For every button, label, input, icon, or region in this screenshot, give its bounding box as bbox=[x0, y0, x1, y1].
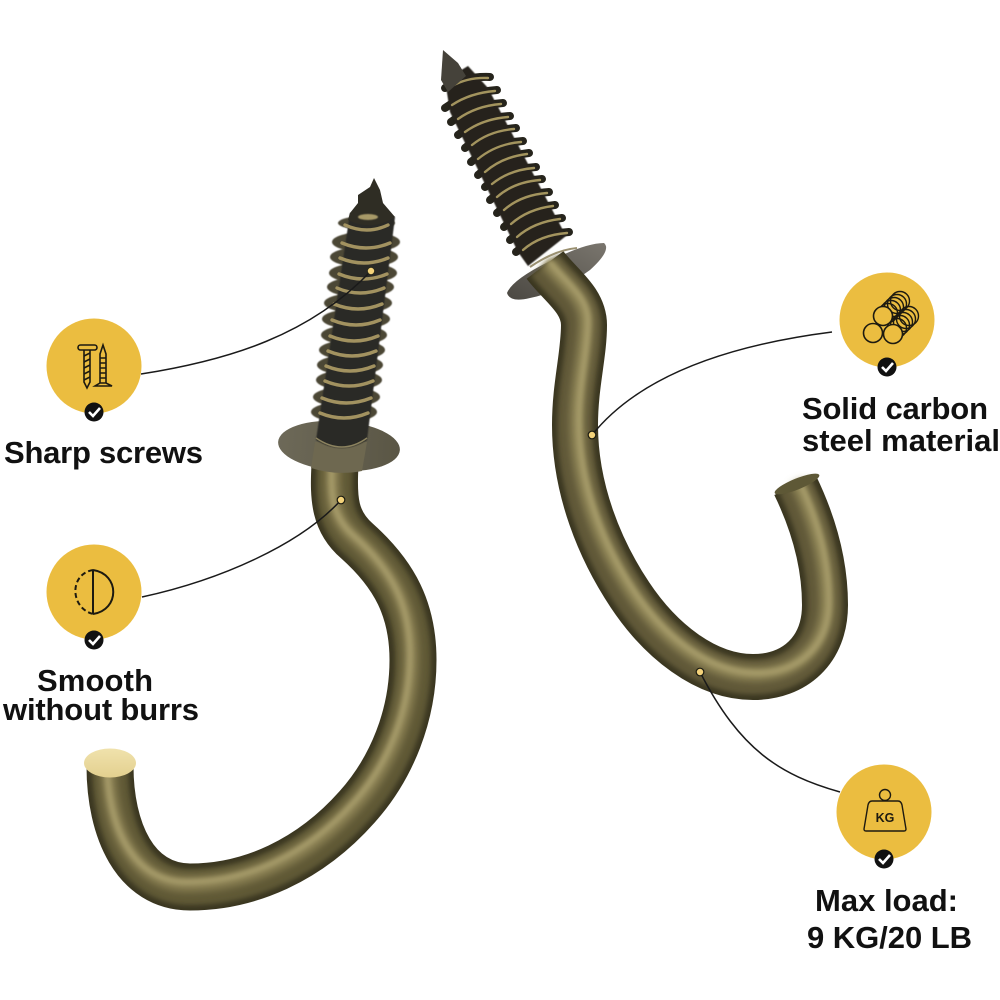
icon badge: screws bbox=[46, 318, 142, 414]
label: Smooth bbox=[37, 663, 153, 698]
check mark badge bbox=[878, 358, 896, 376]
label line 2: 9 KG/20 LB bbox=[807, 920, 972, 955]
right screw tip bbox=[441, 50, 466, 92]
icon: two screws bbox=[78, 345, 112, 388]
icon badge: steel rods bbox=[840, 272, 934, 368]
feature: sharp screws bbox=[4, 318, 203, 470]
left screw tip highlight bbox=[358, 214, 378, 220]
icon: stacked rods bbox=[864, 292, 918, 344]
left washer bbox=[276, 417, 402, 475]
right washer bbox=[507, 243, 606, 300]
check mark badge bbox=[84, 630, 104, 650]
left screw tip bbox=[348, 178, 395, 225]
connector: solid carbon steel bbox=[588, 332, 832, 439]
left washer collar bbox=[311, 442, 367, 473]
check mark badge bbox=[84, 402, 104, 422]
left screw base ring bbox=[316, 438, 367, 447]
feature: smooth without burrs bbox=[2, 544, 199, 727]
label line 2: steel material bbox=[802, 423, 1000, 458]
left hook body bbox=[107, 460, 413, 887]
icon: half solid half dashed circle bbox=[75, 570, 113, 614]
label: Sharp screws bbox=[4, 435, 203, 470]
label line 2: without burrs bbox=[2, 692, 199, 727]
right washer collar ring bbox=[530, 248, 577, 267]
right hook bbox=[441, 50, 829, 677]
icon badge: weight bbox=[836, 764, 932, 860]
connector: max load bbox=[696, 668, 840, 792]
label: Solid carbon bbox=[802, 391, 988, 426]
left screw shaft bbox=[316, 213, 395, 448]
feature: solid carbon steel material bbox=[802, 272, 1000, 458]
icon badge: half circle bbox=[46, 544, 142, 640]
left hook wood-coloured cut end bbox=[84, 748, 136, 778]
left screw gold thread lines bbox=[320, 225, 390, 418]
feature: max load bbox=[807, 764, 972, 955]
icon: KG weight bbox=[864, 790, 906, 831]
right screw gold thread lines bbox=[452, 78, 567, 250]
icon: KG weight: KG bbox=[876, 811, 894, 825]
connector: smooth without burrs bbox=[142, 496, 345, 597]
check mark badge bbox=[874, 850, 894, 868]
connector: sharp screws bbox=[141, 267, 375, 374]
label: Max load: bbox=[815, 883, 958, 918]
left hook bbox=[84, 178, 413, 887]
right screw shaft bbox=[445, 66, 566, 266]
right hook body bbox=[545, 261, 829, 677]
right screw thread ridges bbox=[445, 77, 569, 252]
right hook cut end bbox=[773, 470, 821, 498]
left screw thread ridges bbox=[311, 216, 400, 422]
